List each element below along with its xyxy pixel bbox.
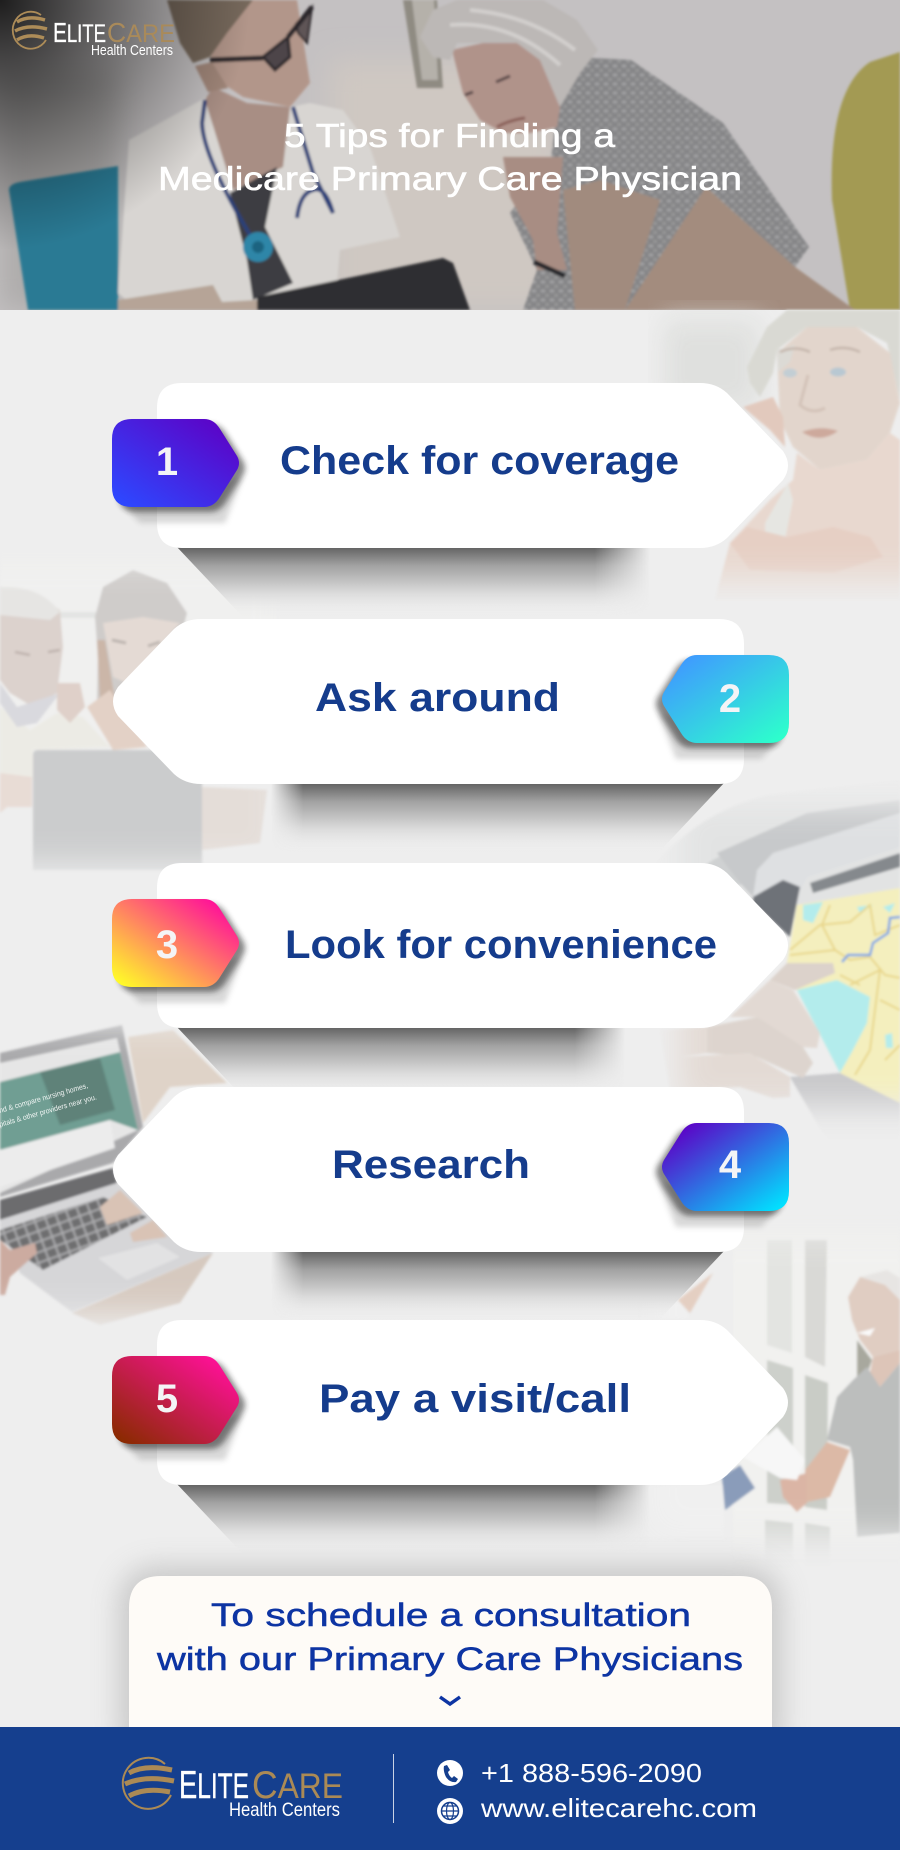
panel: tip 1 bbox=[112, 383, 788, 616]
icon: chevron down bbox=[440, 1697, 460, 1704]
website: www.elitecarehc.com bbox=[480, 1793, 757, 1823]
card shape bbox=[113, 1087, 744, 1252]
background photo: handshake at door bbox=[678, 1240, 900, 1544]
card shape bbox=[157, 1320, 788, 1485]
card shape bbox=[157, 863, 788, 1028]
heading: Pay a visit/call bbox=[319, 1377, 631, 1421]
yellow chair bbox=[832, 52, 900, 310]
icon: globe bbox=[437, 1798, 463, 1824]
panel: tip 4: 4 bbox=[719, 1143, 742, 1187]
title bbox=[158, 117, 742, 197]
panel: tip 3: 3 bbox=[156, 923, 178, 967]
doctor bbox=[118, 98, 400, 310]
footer logo: ELITE bbox=[179, 1764, 249, 1807]
panel: tip 2: 2 bbox=[719, 677, 741, 721]
patient bbox=[510, 57, 809, 310]
number badge 3 bbox=[112, 899, 239, 987]
panel: tip 5 bbox=[112, 1320, 788, 1553]
background photo: couple at laptop bbox=[0, 570, 267, 870]
blue chair bbox=[9, 166, 118, 310]
number badge 2 bbox=[662, 655, 789, 743]
heading: Look for convenience bbox=[285, 923, 717, 967]
number badge 1 bbox=[112, 419, 239, 507]
phone number: +1 888-596-2090 bbox=[481, 1758, 702, 1788]
footer logo: CARE bbox=[252, 1764, 343, 1807]
panel: tip 5: 5 bbox=[156, 1377, 178, 1421]
number badge 5 bbox=[112, 1356, 239, 1444]
tablet bbox=[257, 258, 470, 310]
callout: schedule a consultation: with our Primary Care Physicians bbox=[156, 1641, 743, 1677]
title: Medicare Primary Care Physician bbox=[158, 160, 742, 197]
icon: phone bbox=[437, 1760, 463, 1786]
footer logo bbox=[123, 1758, 343, 1821]
laptop screen text: pitals & other providers near you. bbox=[0, 1092, 98, 1129]
header logo: Health Centers bbox=[91, 42, 173, 59]
header logo: ELITE bbox=[53, 17, 106, 48]
background photo: woman on phone bbox=[660, 310, 900, 600]
title: 5 Tips for Finding a bbox=[284, 117, 616, 154]
panel: tip 3 bbox=[112, 863, 788, 1096]
heading: Research bbox=[332, 1143, 530, 1187]
header logo bbox=[13, 12, 175, 59]
card shape bbox=[157, 383, 788, 548]
wall picture frame bbox=[403, 0, 443, 88]
heading: Ask around bbox=[315, 676, 560, 720]
callout: schedule a consultation: To schedule a consultation bbox=[211, 1597, 691, 1633]
background photo: car dashboard with map bbox=[672, 800, 900, 1118]
panel: tip 2 bbox=[113, 619, 789, 852]
panel: tip 4 bbox=[113, 1087, 789, 1320]
callout: schedule a consultation bbox=[119, 1566, 782, 1766]
header logo: CARE bbox=[107, 17, 175, 48]
footer bbox=[0, 1727, 900, 1850]
panel: tip 1: 1 bbox=[156, 440, 178, 484]
number badge 4 bbox=[662, 1123, 789, 1211]
card shape bbox=[113, 619, 744, 784]
heading: Check for coverage bbox=[280, 439, 679, 483]
footer logo: Health Centers bbox=[229, 1800, 340, 1821]
header photo: doctor and senior patient bbox=[0, 0, 900, 310]
background photo: laptop with search website bbox=[0, 1025, 227, 1325]
laptop screen text: nd & compare nursing homes, bbox=[0, 1081, 89, 1115]
